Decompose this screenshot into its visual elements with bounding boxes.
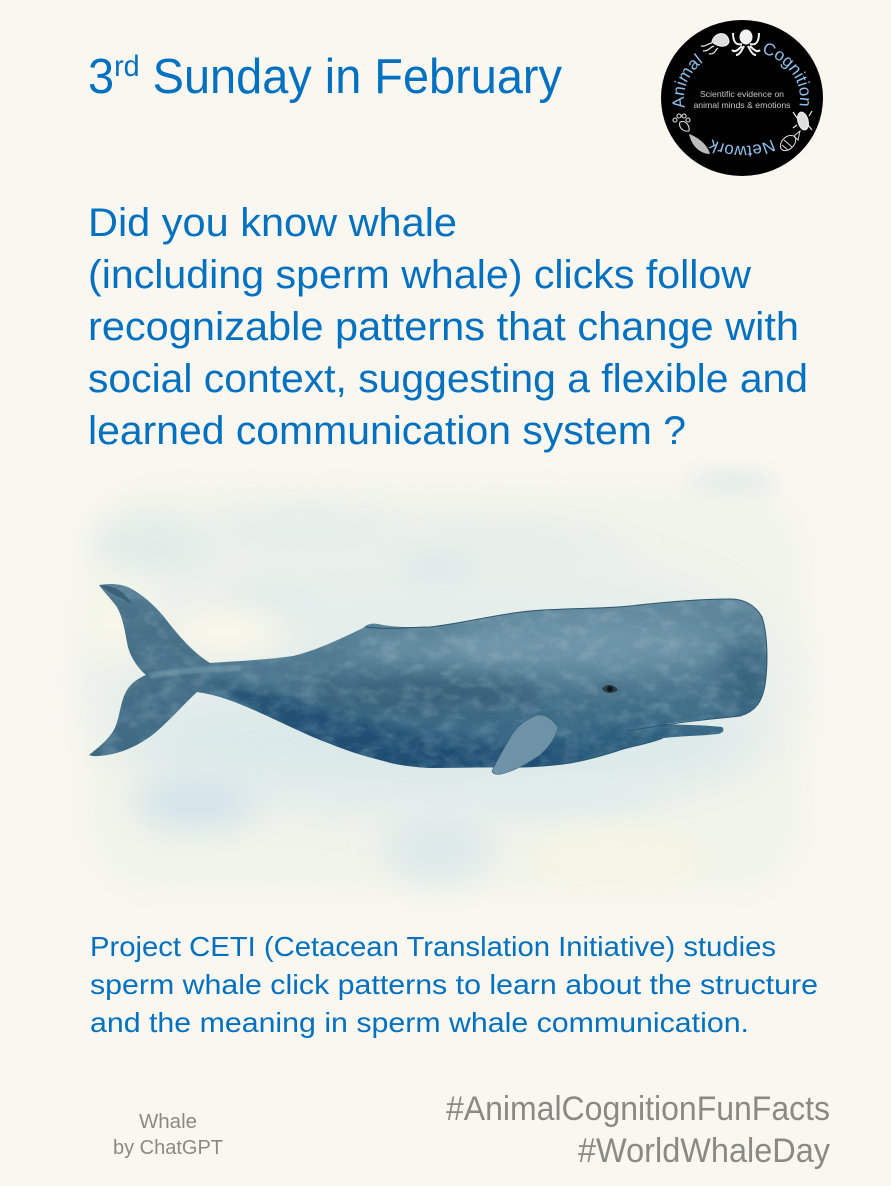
hashtags: #AnimalCognitionFunFacts	[446, 1090, 830, 1128]
whale body and tail	[89, 584, 766, 768]
image credit: Whale	[139, 1111, 197, 1133]
logo ring text: Animal: Animal	[672, 53, 702, 108]
logo ring text: Cognition: Cognition	[764, 43, 810, 106]
whale eye	[597, 680, 623, 700]
heading: question	[88, 201, 808, 453]
body text: Project CETI	[90, 931, 818, 1038]
body text: Project CETI: sperm whale click patterns to learn about the structure	[90, 969, 818, 1000]
icon: feather	[689, 134, 710, 154]
heading: question: Did you know whale	[88, 201, 457, 245]
heading: question: (including sperm whale) clicks follow	[88, 253, 751, 297]
whale flipper	[492, 715, 558, 774]
image credit: by ChatGPT	[113, 1137, 223, 1159]
body text: Project CETI: Project CETI (Cetacean Translation Initiative) studies	[90, 931, 776, 962]
body text: Project CETI: and the meaning in sperm whale communication.	[90, 1007, 749, 1038]
icon: beetle	[793, 111, 812, 131]
title: date: 3	[88, 50, 115, 104]
hashtags	[446, 1090, 830, 1170]
image credit	[113, 1111, 223, 1159]
hashtags: #WorldWhaleDay	[578, 1132, 830, 1170]
title: date: Sunday in February	[140, 50, 562, 104]
icon: jellyfish	[701, 34, 729, 54]
heading: question: recognizable patterns that change with	[88, 305, 799, 349]
logo tagline	[693, 89, 791, 110]
illustration: sperm whale	[80, 580, 780, 780]
whale outline	[366, 599, 767, 767]
heading: question: learned communication system ?	[88, 409, 686, 453]
watercolor wash background	[75, 470, 805, 895]
heading: question: social context, suggesting a flexible and	[88, 357, 808, 401]
logo ring text: Network: Network	[708, 139, 776, 157]
logo tagline: animal minds & emotions	[693, 100, 791, 110]
title: date: rd	[114, 50, 140, 83]
icon: paw	[673, 114, 690, 131]
icon: octopus	[732, 30, 760, 55]
logo tagline: Scientific evidence on	[700, 89, 784, 99]
icon: fish	[777, 131, 800, 154]
logo: Animal Cognition Network	[661, 20, 823, 176]
